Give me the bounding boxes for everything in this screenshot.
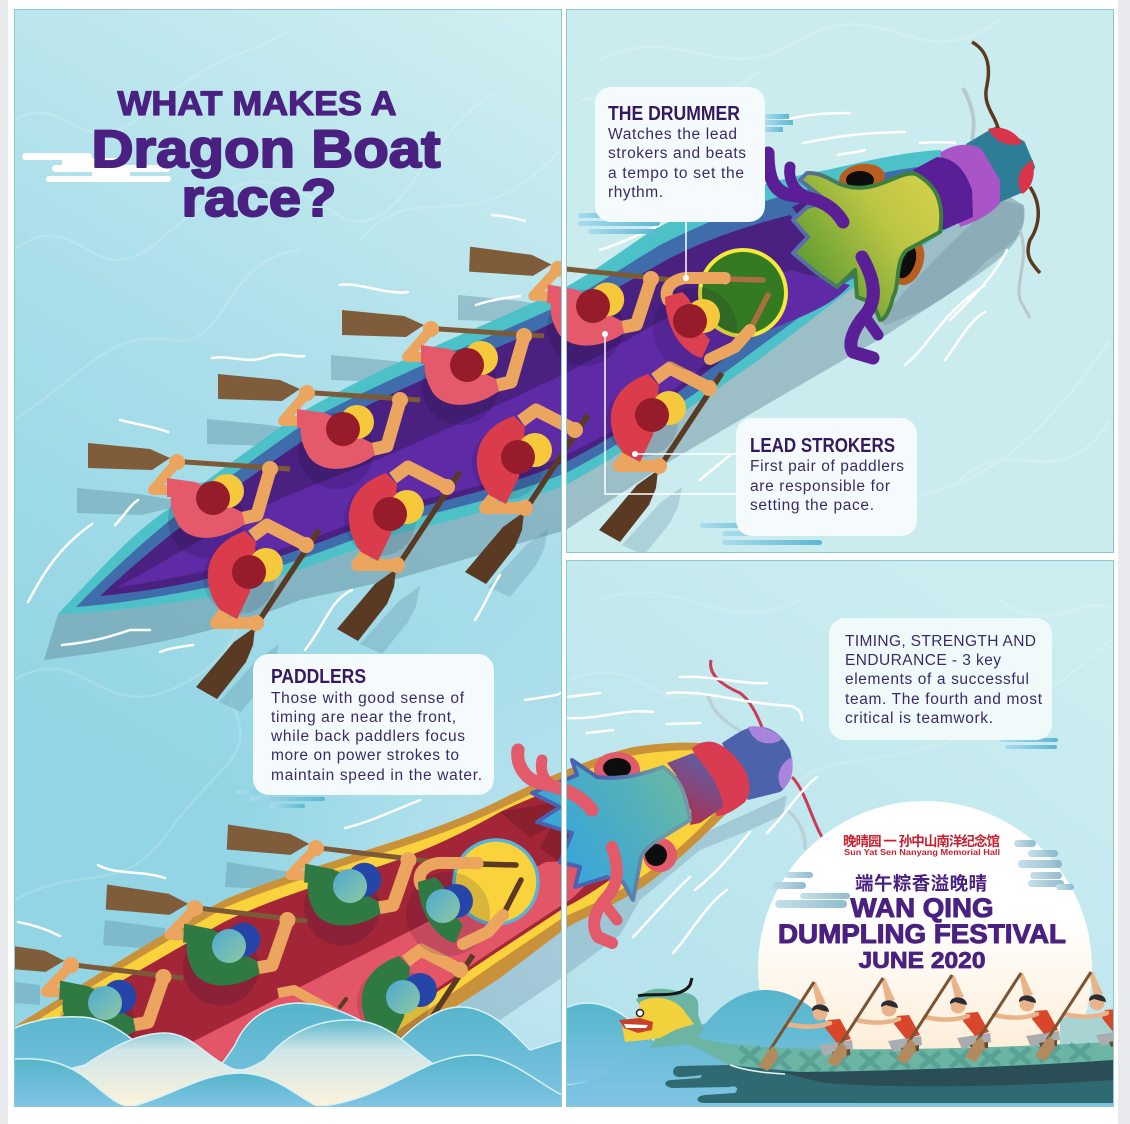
paddler: red boat 3: [15, 946, 184, 1038]
drummer purple boat: [653, 274, 768, 371]
red boat oar shadows: [14, 862, 290, 1005]
purple boat shadow: [44, 160, 1024, 660]
water pattern: [14, 20, 1110, 900]
rower 1: [758, 982, 853, 1071]
title: WHAT MAKES A: [118, 85, 396, 123]
small dragon head: [619, 978, 704, 1048]
reflection: [665, 1060, 1114, 1103]
clouds: title: [22, 153, 171, 182]
paddler: red boat 2: [101, 885, 309, 1010]
connector lines: [605, 222, 736, 494]
drum: [700, 250, 786, 336]
paddler: top row 3: [342, 310, 544, 425]
paddler: bottom row 2: [337, 467, 460, 641]
title: [92, 85, 440, 228]
callout: paddlers: Those with good sense of: [271, 690, 465, 707]
rower 5: [1035, 972, 1130, 1061]
red boat hull: [14, 743, 730, 1063]
callout: the drummer: THE DRUMMER: [608, 103, 740, 125]
paddler: red boat lower left arm: [278, 990, 346, 1013]
dragon head: green: [768, 42, 1040, 358]
connector dots: [602, 275, 689, 457]
title: Dragon Boat: [92, 120, 440, 179]
clouds: moon: [772, 840, 1074, 908]
callout: timing strength endurance: team. The fourth and most: [845, 691, 1043, 708]
paddler: red boat 1: [222, 825, 430, 950]
event text: [778, 833, 1066, 973]
callout: paddlers: maintain speed in the water.: [271, 767, 482, 784]
paddler: bottom row 3: [465, 410, 588, 584]
purple boat hull: [58, 150, 1000, 614]
paddler: red boat lower: [357, 943, 476, 1038]
callout: timing strength endurance: [829, 618, 1052, 740]
callout: lead strokers: [736, 418, 917, 536]
paddler: top row 4: [466, 247, 672, 369]
splashes: [18, 113, 1007, 953]
oar shadows: [77, 295, 682, 712]
callout: lead strokers: LEAD STROKERS: [750, 435, 895, 457]
callout: paddlers: more on power strokes to: [271, 747, 459, 764]
callout: timing strength endurance: ENDURANCE - 3 key: [845, 652, 1001, 669]
dragon head: blue: [518, 660, 822, 943]
callout: paddlers: PADDLERS: [271, 666, 366, 688]
drum red boat: [454, 840, 538, 924]
event text: Sun Yat Sen Nanyang Memorial Hall: [844, 847, 1000, 857]
waves left panel: [14, 1003, 562, 1107]
callout: paddlers: while back paddlers focus: [270, 728, 465, 745]
callout: timing strength endurance: elements of a successful: [845, 671, 1029, 688]
callout: the drummer: [595, 87, 765, 222]
hills: [566, 990, 1114, 1107]
callout: lead strokers: are responsible for: [750, 478, 890, 495]
callout: the drummer: Watches the lead: [608, 126, 737, 143]
rower 3: [896, 975, 991, 1064]
red boat shadow: [458, 795, 787, 1020]
callout: lead strokers: First pair of paddlers: [750, 458, 904, 475]
event text: DUMPLING FESTIVAL: [778, 919, 1066, 949]
rower 2: [827, 978, 922, 1067]
callout: the drummer: a tempo to set the: [608, 165, 744, 182]
moon circle: [758, 801, 1092, 1050]
small dragon boat: [619, 978, 1114, 1103]
callout: timing strength endurance: TIMING, STRENGTH AND: [845, 633, 1036, 650]
callout: paddlers: [253, 654, 494, 795]
rower 4: [965, 973, 1060, 1062]
event text: 端午粽香溢晚晴: [855, 873, 987, 894]
event text: JUNE 2020: [858, 947, 986, 973]
callout: paddlers: timing are near the front,: [271, 709, 456, 726]
water bottom right: [860, 1103, 1113, 1106]
callout: the drummer: strokers and beats: [608, 145, 746, 162]
title: race?: [182, 169, 336, 228]
event text: 晚晴园 一 孙中山南洋纪念馆: [843, 833, 1000, 849]
paddler: bottom row 4: [599, 368, 722, 542]
paddler: top row 2: [218, 374, 420, 489]
callout: lead strokers: setting the pace.: [750, 497, 874, 514]
clouds: callouts: [236, 114, 1058, 808]
paddler: bottom row 1: [196, 525, 319, 699]
paddler: top row 1: [88, 443, 290, 558]
drummer red boat: [406, 858, 521, 956]
event text: WAN QING: [850, 893, 994, 923]
callout: timing strength endurance: critical is teamwork.: [845, 710, 993, 727]
callout: the drummer: rhythm.: [608, 184, 663, 201]
